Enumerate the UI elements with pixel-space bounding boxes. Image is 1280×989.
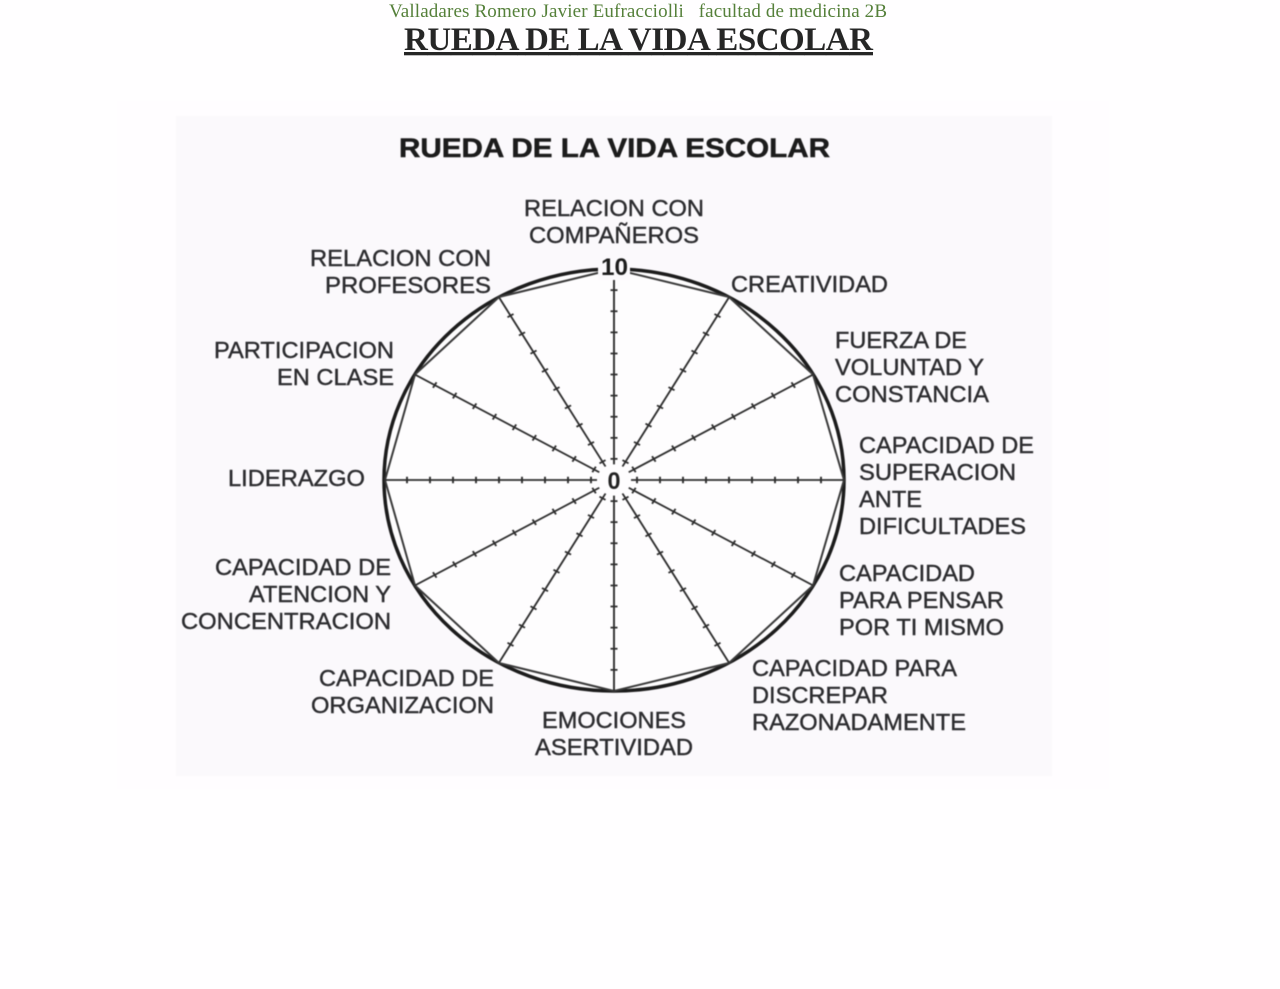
label: capacidad para discrepar razonadamente: DISCREPAR xyxy=(752,682,888,708)
label: relacion con companeros xyxy=(524,195,704,248)
label: fuerza de voluntad y constancia: VOLUNTAD Y xyxy=(835,354,984,380)
label: capacidad de atencion y concentracion: ATENCION Y xyxy=(249,581,391,607)
label: capacidad para discrepar razonadamente: CAPACIDAD PARA xyxy=(752,655,958,681)
label: emociones asertividad: EMOCIONES xyxy=(542,707,686,733)
label: emociones asertividad xyxy=(535,707,693,760)
label: participacion en clase: PARTICIPACION xyxy=(214,337,394,363)
label: capacidad para discrepar razonadamente xyxy=(752,655,966,735)
label: capacidad para pensar por ti mismo: CAPACIDAD xyxy=(839,560,975,586)
scale value 0: 0 xyxy=(608,468,620,495)
page title: RUEDA DE LA VIDA ESCOLAR xyxy=(404,22,874,58)
label: liderazgo: LIDERAZGO xyxy=(228,465,365,491)
label: relacion con profesores xyxy=(310,245,491,298)
label: relacion con profesores: RELACION CON xyxy=(310,245,491,271)
author line: Valladares Romero Javier Eufracciolli facultad de medicina 2B xyxy=(389,1,887,22)
label: capacidad para pensar por ti mismo xyxy=(839,560,1004,640)
label: participacion en clase: EN CLASE xyxy=(277,364,394,390)
label: capacidad de superacion ante dificultades xyxy=(859,432,1034,539)
label: fuerza de voluntad y constancia: FUERZA DE xyxy=(835,327,967,353)
label: capacidad de superacion ante dificultades: CAPACIDAD DE xyxy=(859,432,1034,458)
label: capacidad de superacion ante dificultades: SUPERACION xyxy=(859,459,1016,485)
label: fuerza de voluntad y constancia xyxy=(835,327,990,407)
label: creatividad: CREATIVIDAD xyxy=(731,271,888,297)
label: capacidad de organizacion xyxy=(311,665,494,718)
inner dodecagon xyxy=(385,269,844,691)
image panel: school life wheel xyxy=(116,100,1110,790)
label: participacion en clase xyxy=(214,337,394,390)
label: capacidad de organizacion: ORGANIZACION xyxy=(311,692,494,718)
scale spokes 0 to 10 xyxy=(384,269,844,691)
label: capacidad para pensar por ti mismo: POR TI MISMO xyxy=(839,614,1004,640)
label: fuerza de voluntad y constancia: CONSTANCIA xyxy=(835,381,990,407)
label: capacidad de atencion y concentracion: CAPACIDAD DE xyxy=(215,554,391,580)
label: capacidad de atencion y concentracion: CONCENTRACION xyxy=(181,608,391,634)
label: capacidad para discrepar razonadamente: RAZONADAMENTE xyxy=(752,709,966,735)
label: relacion con companeros: RELACION CON xyxy=(524,195,704,221)
label: relacion con profesores: PROFESORES xyxy=(325,272,491,298)
outer circle xyxy=(384,269,844,691)
scale value 10: 10 xyxy=(601,254,628,281)
label: emociones asertividad: ASERTIVIDAD xyxy=(535,734,693,760)
label: capacidad de atencion y concentracion xyxy=(181,554,391,634)
wheel chart xyxy=(384,254,844,691)
label: capacidad de organizacion: CAPACIDAD DE xyxy=(319,665,494,691)
label: capacidad de superacion ante dificultades: ANTE xyxy=(859,486,922,512)
label: capacidad para pensar por ti mismo: PARA PENSAR xyxy=(839,587,1004,613)
label: relacion con companeros: COMPAÑEROS xyxy=(529,222,699,248)
label: capacidad de superacion ante dificultades: DIFICULTADES xyxy=(859,513,1026,539)
panel heading: RUEDA DE LA VIDA ESCOLAR xyxy=(399,133,830,163)
